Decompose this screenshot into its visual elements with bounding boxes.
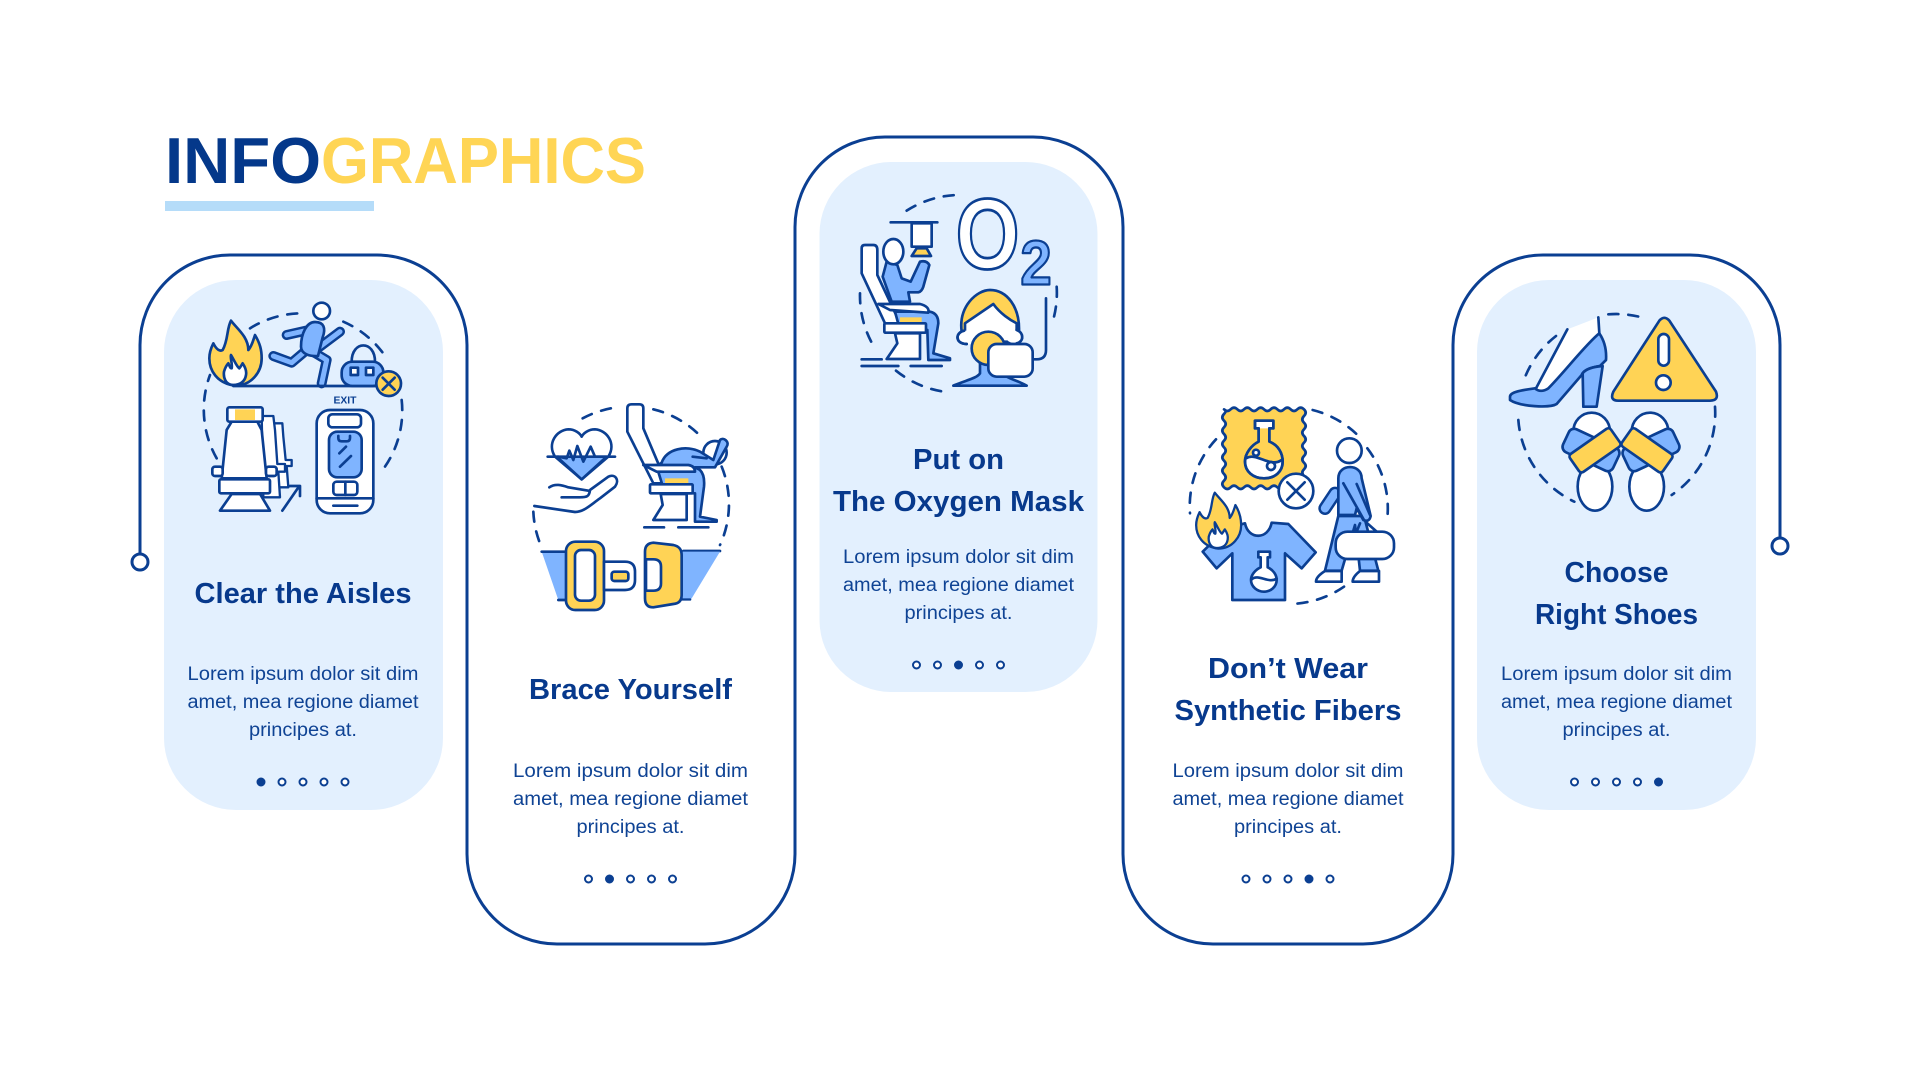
body text: principes at.	[576, 817, 684, 838]
body text: Lorem ipsum dolor sit dim	[1501, 664, 1732, 685]
heading: Put on	[913, 444, 1004, 476]
body text: Lorem ipsum dolor sit dim	[513, 761, 748, 782]
body text: principes at.	[249, 720, 357, 741]
heading	[1535, 557, 1698, 631]
panel: brace yourself	[513, 404, 749, 882]
icon: oxygen mask: O	[956, 178, 1020, 290]
panel: oxygen mask	[820, 162, 1098, 692]
icon: heel, warning sign and sandals	[1510, 314, 1717, 511]
body text: principes at.	[1562, 720, 1670, 741]
pagination dots	[913, 662, 1004, 668]
body text: Lorem ipsum dolor sit dim	[1172, 761, 1404, 782]
title: GRAPHICS	[321, 124, 646, 197]
body text	[1501, 664, 1733, 741]
heading: The Oxygen Mask	[833, 486, 1085, 518]
pagination dots	[1242, 876, 1334, 882]
icon: oxygen mask: 2	[1020, 228, 1052, 298]
heading	[1174, 653, 1402, 727]
body text: Lorem ipsum dolor sit dim	[188, 664, 418, 685]
body text: amet, mea regione diamet	[843, 575, 1075, 596]
heading: Choose	[1564, 557, 1668, 589]
body text	[513, 761, 749, 838]
panel: choose right shoes	[1477, 280, 1756, 810]
body text: principes at.	[904, 603, 1012, 624]
body text: amet, mea regione diamet	[1172, 789, 1404, 810]
pagination dots	[585, 876, 676, 882]
heading: Synthetic Fibers	[1174, 695, 1402, 727]
pagination dots	[258, 778, 348, 786]
heading: Brace Yourself	[529, 674, 732, 706]
body text	[188, 664, 419, 741]
panel: clear the aisles	[164, 280, 443, 810]
heading: Clear the Aisles	[194, 578, 412, 610]
title	[165, 124, 646, 211]
icon: fire, running person and exit: EXIT	[334, 396, 357, 407]
body text	[1172, 761, 1404, 838]
body text: amet, mea regione diamet	[513, 789, 749, 810]
connecting outline	[132, 137, 1788, 944]
heading: Don’t Wear	[1208, 653, 1368, 685]
heading: Right Shoes	[1535, 599, 1698, 631]
body text: principes at.	[1234, 817, 1342, 838]
body text: amet, mea regione diamet	[188, 692, 419, 713]
icon: synthetic fabric, burning shirt and traveller	[1190, 408, 1394, 604]
icon: oxygen mask	[860, 178, 1057, 392]
heading	[833, 444, 1085, 518]
pagination dots	[1571, 778, 1662, 786]
icon: heart, braced passenger and seat belt	[533, 404, 729, 610]
body text: amet, mea regione diamet	[1501, 692, 1733, 713]
body text	[843, 547, 1075, 624]
body text: Lorem ipsum dolor sit dim	[843, 547, 1074, 568]
panel: synthetic fibers	[1172, 408, 1404, 882]
icon: fire, running person and exit	[204, 303, 402, 513]
title: INFO	[165, 124, 321, 197]
